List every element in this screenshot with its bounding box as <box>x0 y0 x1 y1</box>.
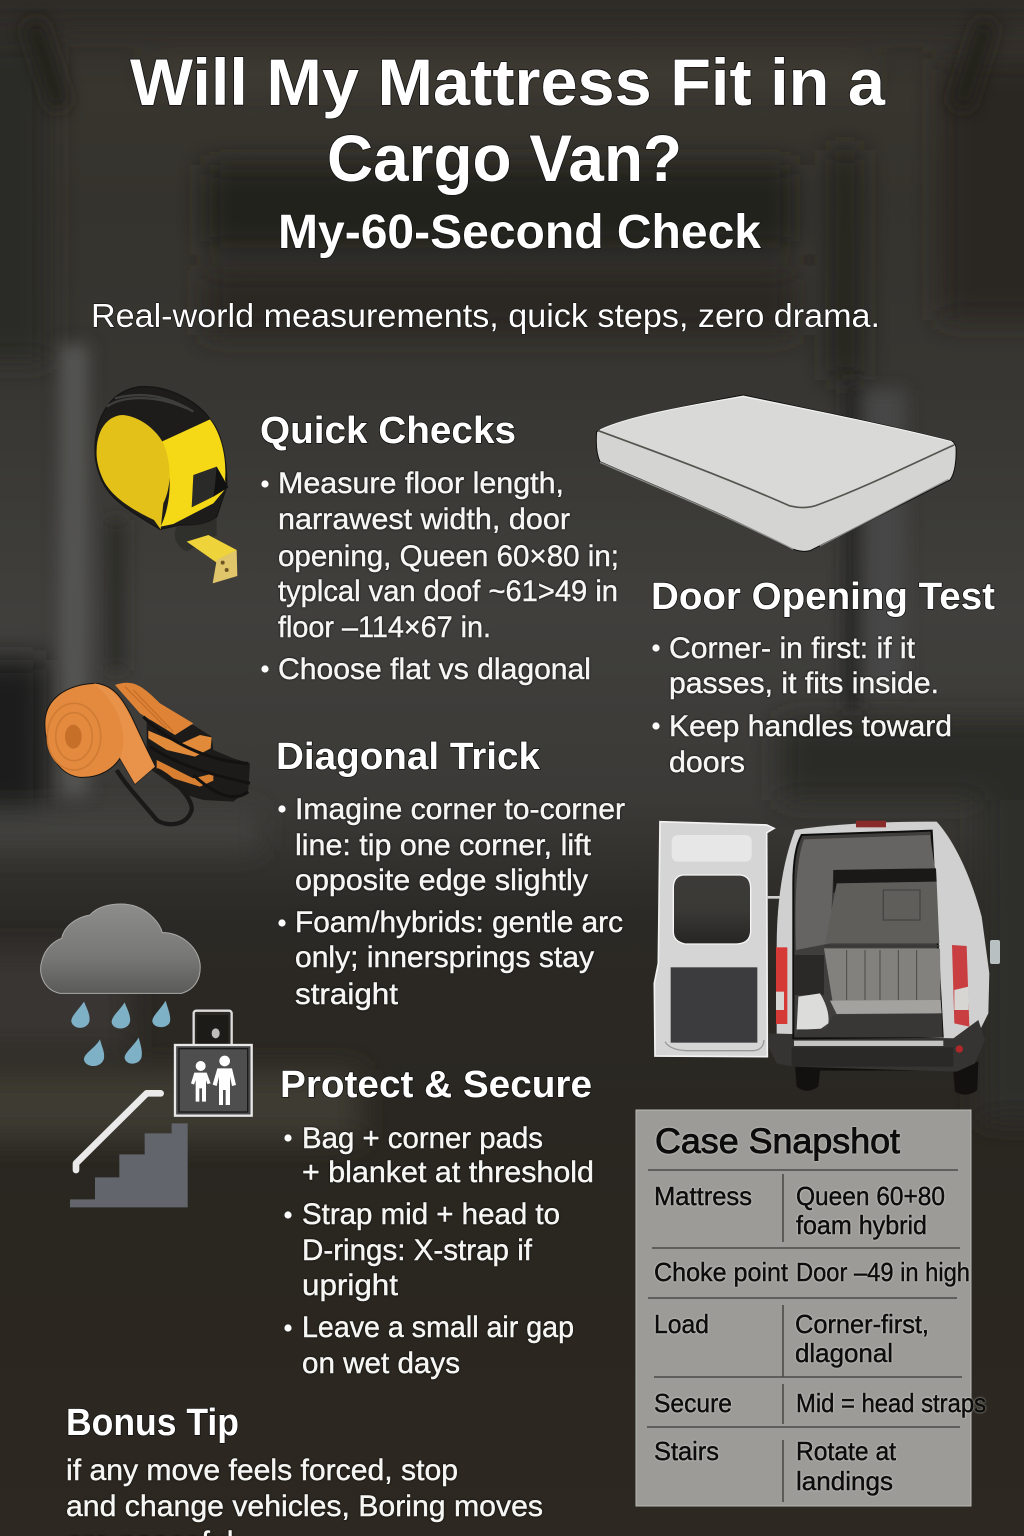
row: stairs: landings <box>796 1466 893 1496</box>
list: diagonal trick: Imagine corner to-corner <box>295 793 625 826</box>
van body <box>768 821 1000 1095</box>
row: choke point: Door –49 in high <box>796 1257 970 1287</box>
tagline: Real-world measurements, quick steps, zero drama. <box>91 297 880 334</box>
row: secure: Secure <box>654 1388 732 1418</box>
row: load: Corner-first, <box>795 1309 929 1339</box>
list: protect and secure <box>284 1122 594 1380</box>
list: diagonal trick: opposite edge slightly <box>295 864 588 897</box>
row: load: Load <box>654 1309 709 1339</box>
list: quick checks: typlcal van doof ~61>49 in <box>278 575 618 608</box>
list: door opening test: passes, it fits inside. <box>669 667 939 700</box>
list: quick checks: Choose flat vs dlagonal <box>278 653 591 686</box>
row: mattress <box>654 1181 945 1240</box>
van door <box>654 822 774 1057</box>
list: protect and secure: D-rings: X-strap if <box>302 1234 533 1267</box>
row: load <box>654 1309 929 1368</box>
row: secure <box>654 1388 986 1418</box>
heading: door opening test: Door Opening Test <box>651 576 995 618</box>
heading: diagonal trick: Diagonal Trick <box>276 736 541 778</box>
list: diagonal trick: straight <box>295 978 399 1011</box>
list: diagonal trick: Foam/hybrids: gentle arc <box>295 906 623 939</box>
subtitle: My-60-Second Check <box>278 206 761 259</box>
title <box>130 45 886 195</box>
list: door opening test <box>652 632 952 779</box>
row: load: dlagonal <box>795 1338 893 1368</box>
list: quick checks <box>261 467 619 686</box>
text: bonus tip body: and change vehicles, Boring moves <box>66 1490 543 1523</box>
row: choke point <box>654 1257 970 1287</box>
icon: orange straps <box>45 683 250 824</box>
row: stairs: Rotate at <box>796 1436 897 1466</box>
heading: protect and secure: Protect & Secure <box>280 1064 592 1106</box>
list: protect and secure: on wet days <box>302 1347 460 1380</box>
list: quick checks: opening, Queen 60×80 in; <box>278 540 619 573</box>
list: door opening test: doors <box>669 746 745 779</box>
heading: quick checks: Quick Checks <box>260 410 516 452</box>
list: diagonal trick: only; innersprings stay <box>295 941 594 974</box>
list: protect and secure: Strap mid + head to <box>302 1198 560 1231</box>
list: quick checks: Measure floor length, <box>278 467 564 500</box>
list: door opening test: Corner- in first: if it <box>669 632 916 665</box>
list: protect and secure: Bag + corner pads <box>302 1122 543 1155</box>
list: door opening test: Keep handles toward <box>669 710 952 743</box>
icon: cargo van with open door <box>654 821 1000 1095</box>
row: mattress: Queen 60+80 <box>796 1181 945 1211</box>
table title: Case Snapshot <box>655 1122 900 1161</box>
list: protect and secure: Leave a small air gap <box>302 1311 574 1344</box>
heading: bonus tip: Bonus Tip <box>66 1402 239 1444</box>
title: Cargo Van? <box>327 121 682 195</box>
icon: tape measure <box>95 387 237 583</box>
row: mattress: Mattress <box>654 1181 752 1211</box>
panel: case snapshot <box>636 1110 986 1506</box>
icon: mattress <box>596 395 956 551</box>
list: quick checks: floor –114×67 in. <box>278 611 491 644</box>
list: protect and secure: upright <box>302 1269 399 1302</box>
icon: stairs with handrail <box>70 1093 188 1207</box>
text: bonus tip body: if any move feels forced, stop <box>66 1454 458 1487</box>
text: bonus tip body <box>66 1454 543 1536</box>
title: Will My Mattress Fit in a <box>130 45 886 119</box>
list: diagonal trick <box>278 793 625 1011</box>
list: quick checks: narrawest width, door <box>278 503 570 536</box>
table rules <box>647 1170 962 1502</box>
row: secure: Mid = head straps <box>796 1388 986 1418</box>
list: protect and secure: + blanket at threshold <box>302 1156 594 1189</box>
row: stairs <box>654 1436 897 1496</box>
icon: lock with people <box>175 1011 252 1116</box>
row: mattress: foam hybrid <box>796 1210 927 1240</box>
icon: rain cloud <box>41 904 200 1066</box>
row: stairs: Stairs <box>654 1436 719 1466</box>
row: choke point: Choke point <box>654 1257 789 1287</box>
list: diagonal trick: line: tip one corner, lift <box>295 829 592 862</box>
